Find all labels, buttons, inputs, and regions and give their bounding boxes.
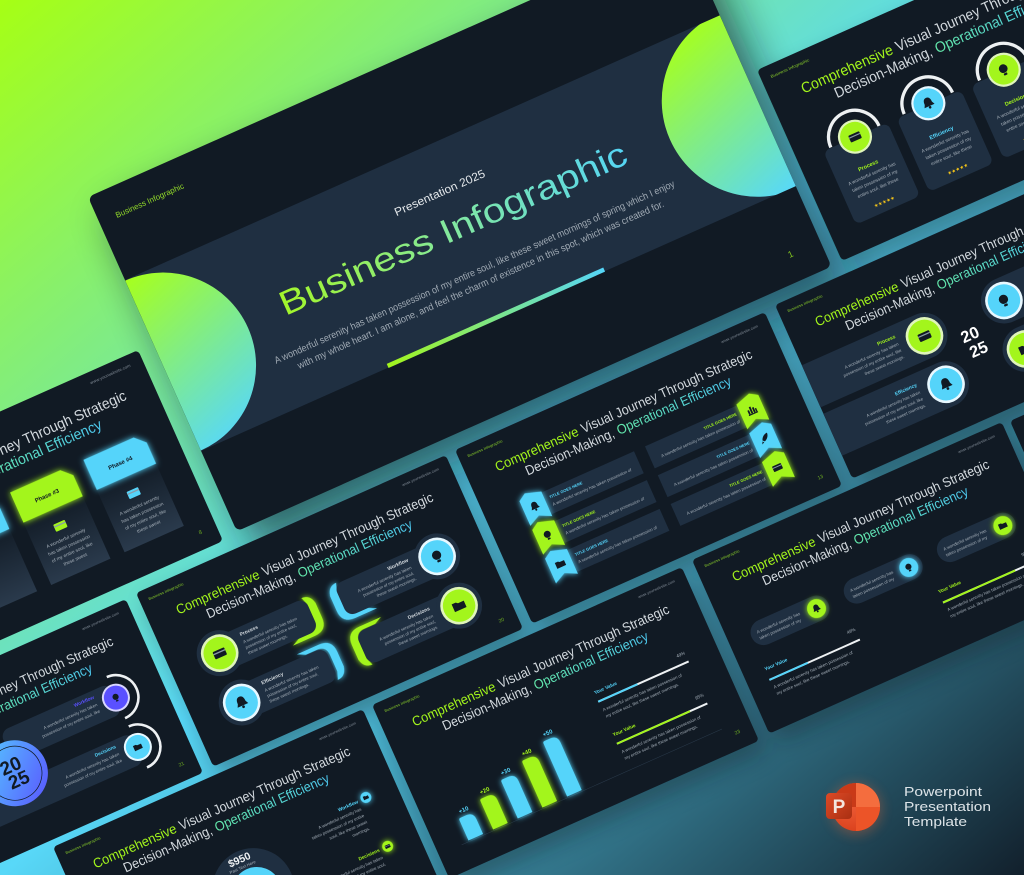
row: decisions: these sweet mornings. <box>397 624 439 646</box>
bracket: cyan left <box>297 639 348 691</box>
title: Decision-Making, <box>204 569 298 621</box>
card: phase 3: has taken possession <box>47 534 92 558</box>
title <box>798 0 1024 113</box>
slide: 2025 centre: Business Infographic <box>787 294 823 313</box>
title <box>730 457 998 599</box>
row: efficiency <box>211 642 341 733</box>
template caption <box>904 784 991 829</box>
row: workflow: possession of my entire soul, like <box>41 708 101 739</box>
title <box>174 490 442 632</box>
block: workflow: taken possession of my entire <box>311 813 366 841</box>
badge: 2025: 20 <box>958 323 982 347</box>
title: Comprehensive <box>493 424 581 474</box>
card: process: Process <box>857 159 879 173</box>
list row right 3: TITLE GOES HERE <box>728 469 764 488</box>
card: phase 3: Phase #3 <box>34 488 61 504</box>
panel: centre band <box>125 15 796 451</box>
title <box>493 347 761 489</box>
list row left 2 <box>555 480 657 543</box>
chart: value circle: $950 <box>226 850 253 871</box>
slide: right edge sliver <box>1010 283 1024 595</box>
title <box>813 202 1024 344</box>
title: Visual Journey Through Strategic <box>176 744 353 833</box>
value bar 95% <box>937 549 1024 619</box>
row: workflow <box>331 526 467 620</box>
card: phase 4: these sweet <box>136 519 162 535</box>
card: phase 4: A wonderful serenity <box>119 494 161 517</box>
main slide shadow <box>108 0 852 549</box>
band: efficiency: Efficiency <box>894 382 918 398</box>
list row right 1: TITLE GOES HERE <box>703 411 738 431</box>
slide: pills and values: www.yourwebsite.com <box>957 434 996 454</box>
bracket: lime right <box>346 617 397 669</box>
badge: 2025 <box>958 322 991 363</box>
row: efficiency: possession of my entire soul, <box>266 671 319 698</box>
title <box>91 744 359 875</box>
card: efficiency: taken possession of my <box>925 136 973 161</box>
list row left 3 <box>567 509 669 572</box>
slide: process brackets: www.yourwebsite.com <box>401 467 440 487</box>
slide: three cards: Business Infographic <box>770 57 810 79</box>
chart: value circle <box>199 835 308 875</box>
slide: phases: www.yourwebsite.com <box>89 363 132 385</box>
slide: ribbon list: 13 <box>817 474 825 482</box>
pill 3: taken possession of my <box>945 534 989 558</box>
slide: bar chart <box>372 567 759 875</box>
pill 2: A wonderful serenity has <box>849 569 894 593</box>
list row right 1 <box>645 405 747 468</box>
bar chart: +20 <box>479 786 491 796</box>
paragraph: with my whole heart. I am alone, and feel the charm of existence in this spot, which was created for. <box>295 199 666 372</box>
row: workflow: Workflow <box>387 558 410 572</box>
card: process: A wonderful serenity has <box>847 161 897 187</box>
ribbon icon: bell <box>517 487 552 526</box>
card: efficiency <box>885 65 994 192</box>
row: process <box>189 591 320 684</box>
slide: three cards <box>757 0 1024 261</box>
band: decisions <box>995 276 1024 379</box>
card: phase 3: these sweet <box>63 552 89 568</box>
block: decisions <box>324 839 400 875</box>
card: process: entire soul, like these <box>857 176 900 200</box>
pill 3 <box>933 508 1020 566</box>
row: decisions: A wonderful serenity has taken <box>65 751 121 780</box>
bar chart: +50 <box>542 729 554 739</box>
title: Visual Journey Through Strategic <box>815 457 992 546</box>
slide: process brackets: 20 <box>498 617 506 625</box>
card: process: taken possession of my <box>851 168 899 194</box>
card: efficiency: Efficiency <box>929 125 956 142</box>
card: phase 4: Phase #4 <box>108 456 134 472</box>
row: decisions: possession of my entire soul, <box>384 619 436 646</box>
card: decisions <box>960 32 1024 159</box>
main title: Business Infographic <box>273 135 633 323</box>
card: phase 3: of my entire soul, like <box>51 541 94 565</box>
value bar 49%: Your Value <box>593 681 618 696</box>
slide: ribbon list: www.yourwebsite.com <box>720 324 759 344</box>
card: process <box>812 98 920 225</box>
card: phase 2 <box>0 499 37 618</box>
badge: 2025: 25 <box>5 767 34 794</box>
title: Operational Efficiency <box>295 516 415 581</box>
badge: 2025 <box>0 730 58 817</box>
value bar 49%: my entire soul, like these sweet mornings. <box>776 659 851 696</box>
slide: main cover <box>90 0 830 530</box>
slide: 2025 purple circle <box>0 599 203 875</box>
row: workflow: possession of my entire soul, <box>362 570 415 598</box>
list row left 1: A wonderful serenity has taken possession of <box>552 467 633 507</box>
list row right 1: A wonderful serenity has taken possession of <box>660 419 742 458</box>
value bar 95%: my entire soul, like these sweet mornings. <box>949 582 1024 619</box>
pill 1: taken possession of my <box>759 617 802 641</box>
title: Decision-Making, <box>760 536 854 588</box>
bracket: lime left <box>277 594 328 646</box>
card: phase 3 <box>10 466 110 585</box>
row: decisions <box>353 575 489 670</box>
value bar 95%: Your Value <box>937 580 962 595</box>
accent bar <box>387 268 605 368</box>
slide: feature slide 950: Business Infographic <box>65 836 101 855</box>
title: Comprehensive <box>174 567 262 617</box>
pill 1: A wonderful serenity has <box>756 611 801 635</box>
title: Decision-Making, <box>523 426 617 478</box>
band: process: possession of my entire soul, like <box>843 348 903 378</box>
row: workflow: these sweet mornings. <box>376 576 417 598</box>
slide: ribbon list: Business Infographic <box>467 439 503 458</box>
title: Comprehensive <box>91 821 179 871</box>
template caption: Powerpoint <box>904 784 982 799</box>
value bar 49% <box>764 627 867 696</box>
value bar 95%: 95% <box>694 692 705 701</box>
slide: pills and values: Business Infographic <box>704 549 740 568</box>
bar chart <box>433 666 722 845</box>
card: efficiency: entire soul, like these <box>930 144 973 167</box>
title: Decision-Making, <box>843 281 937 333</box>
list row left 1 <box>542 451 644 514</box>
list row right 3: A wonderful serenity has taken possession of <box>686 476 767 516</box>
block: workflow: A wonderful serenity has <box>317 807 362 830</box>
title: Comprehensive <box>798 42 896 97</box>
slide: bar chart: www.yourwebsite.com <box>637 579 676 599</box>
title: Decision-Making, <box>440 681 534 733</box>
bar chart: +30 <box>500 767 512 777</box>
row: workflow: Workflow <box>73 695 95 709</box>
card: phase 3: A wonderful serenity <box>45 527 87 550</box>
template caption: Template <box>904 814 967 829</box>
row: workflow <box>0 668 146 767</box>
title: Visual Journey Through Strategic <box>259 490 436 579</box>
slide: phases <box>0 350 223 693</box>
title: Operational Efficiency <box>614 373 734 438</box>
block: workflow: Workflow <box>337 799 360 814</box>
band: efficiency: possession of my entire soul, like <box>864 396 924 426</box>
decor: left half circle <box>125 272 256 450</box>
row: process: these sweet mornings. <box>247 633 288 655</box>
value bar 49% <box>593 650 696 719</box>
slide: feature slide 950 <box>53 709 440 875</box>
title: Comprehensive <box>730 534 818 584</box>
title: Visual Journey Through Strategic <box>495 602 672 691</box>
row: efficiency: A wonderful serenity has taken <box>264 664 320 693</box>
title: Comprehensive <box>813 279 901 329</box>
card: process: ★★★★★ <box>873 195 896 210</box>
row: process: A wonderful serenity has taken <box>242 616 298 644</box>
band: process <box>802 306 955 407</box>
value bar 95%: A wonderful serenity has taken possession of <box>621 714 702 754</box>
ribbon icon: rocket <box>747 419 782 458</box>
title: Operational Efficiency <box>531 628 651 693</box>
slide: process brackets: Business Infographic <box>148 582 184 601</box>
row: process: possession of my entire soul, <box>245 623 297 650</box>
row: decisions: Decisions <box>94 744 117 759</box>
list row left 3: A wonderful serenity has taken possession of <box>577 524 659 564</box>
band: efficiency: these sweet mornings. <box>885 403 927 425</box>
badge: 2025: 25 <box>967 338 991 362</box>
band: process: these sweet mornings. <box>864 354 905 376</box>
slide: 2025 purple circle: www.yourwebsite.com <box>81 611 120 631</box>
value bar 49%: 49% <box>846 627 856 635</box>
list row left 2: A wonderful serenity has taken possession of <box>564 496 646 536</box>
title: Operational Efficiency <box>212 770 332 835</box>
slide: 2025 purple circle: 21 <box>178 761 186 769</box>
title: Operational Efficiency <box>851 483 971 548</box>
band: process: Process <box>876 334 897 347</box>
value bar 49%: A wonderful serenity has taken possession of <box>602 672 683 712</box>
bracket: cyan right <box>326 572 377 624</box>
slide: process brackets <box>136 455 523 767</box>
slide: phases: 8 <box>198 530 203 536</box>
block: workflow <box>304 790 384 853</box>
pill 1 <box>746 591 834 649</box>
pill 2 <box>840 550 927 608</box>
header label: Business Infographic <box>114 182 185 220</box>
list row right 2: TITLE GOES HERE <box>716 440 751 460</box>
slide: bar chart: 23 <box>734 729 742 737</box>
row: decisions: A wonderful serenity has taken <box>378 613 434 642</box>
row: decisions <box>0 717 168 873</box>
bar chart: +10 <box>458 806 470 816</box>
pill 3: A wonderful serenity has <box>942 528 987 552</box>
block: workflow: mornings. <box>351 826 371 838</box>
card: efficiency: A wonderful serenity has <box>921 128 971 155</box>
ribbon icon: folder <box>543 544 578 583</box>
ribbon icon: bulb <box>530 516 565 555</box>
title <box>410 602 678 744</box>
slide: pills and values <box>692 422 1024 734</box>
bar chart: +40 <box>521 748 533 758</box>
title: Decision-Making, <box>832 43 935 102</box>
decor: right half circle <box>662 15 796 197</box>
slide: bar chart: Business Infographic <box>384 694 420 713</box>
band: efficiency <box>823 354 976 456</box>
list row left 1: TITLE GOES HERE <box>548 480 584 499</box>
row: efficiency: these sweet mornings. <box>269 682 310 704</box>
row: workflow: A wonderful serenity has taken <box>357 565 413 593</box>
value bar 95%: my entire soul, like these sweet mornings. <box>624 724 698 761</box>
powerpoint logo <box>826 783 882 835</box>
slide: 2025 centre <box>775 167 1024 479</box>
ribbon icon: card <box>760 448 795 487</box>
page number: 1 <box>786 249 795 260</box>
list row left 3: TITLE GOES HERE <box>574 538 609 557</box>
ribbon icon: chart <box>734 390 769 429</box>
chart: value circle: Past Text Here <box>229 859 257 875</box>
block: decisions: Decisions <box>358 848 381 862</box>
subtitle: Presentation 2025 <box>393 168 487 219</box>
band: workflow <box>974 227 1024 331</box>
list row right 2: A wonderful serenity has taken possession of <box>673 447 754 487</box>
value bar 95% <box>612 692 715 761</box>
value bar 49%: my entire soul, like these sweet mornings. <box>605 682 680 719</box>
slide: feature slide 950: www.yourwebsite.com <box>318 721 357 741</box>
template caption: Presentation <box>904 799 991 814</box>
card: phase 4 <box>83 433 184 552</box>
list row left 2: TITLE GOES HERE <box>561 509 596 528</box>
title: Visual Journey Through Strategic <box>578 347 755 436</box>
row: workflow: A wonderful serenity has taken <box>43 702 99 730</box>
value bar 95%: Your Value <box>612 723 637 738</box>
title: Comprehensive <box>410 679 498 729</box>
card: phase 4: of my entire soul, like <box>124 508 168 532</box>
list row right 2 <box>658 434 760 497</box>
slide: ribbon list <box>455 312 842 624</box>
list row right 3 <box>671 463 773 526</box>
band: process: A wonderful serenity has taken <box>844 341 900 370</box>
value bar 49%: Your Value <box>764 657 789 673</box>
paragraph: A wonderful serenity has taken possession of my entire soul, like these sweet mornings of spring which I enjoy <box>273 179 677 367</box>
band: efficiency: A wonderful serenity has taken <box>865 390 922 418</box>
powerpoint logo: P <box>833 797 846 818</box>
value bar 49%: A wonderful serenity has taken possession of <box>773 650 854 690</box>
row: decisions: possession of my entire soul, like <box>63 758 123 788</box>
row: process: Process <box>239 625 259 638</box>
pill 2: taken possession of my <box>852 576 896 599</box>
block: workflow: soul, like these sweet <box>328 819 369 841</box>
row: efficiency: Efficiency <box>261 671 285 686</box>
row: decisions: Decisions <box>407 606 431 621</box>
card: phase 4: has taken possession <box>121 501 165 525</box>
title: Decision-Making, <box>121 823 215 875</box>
value bar 49%: 49% <box>676 650 686 659</box>
card: efficiency: ★★★★★ <box>947 162 970 177</box>
